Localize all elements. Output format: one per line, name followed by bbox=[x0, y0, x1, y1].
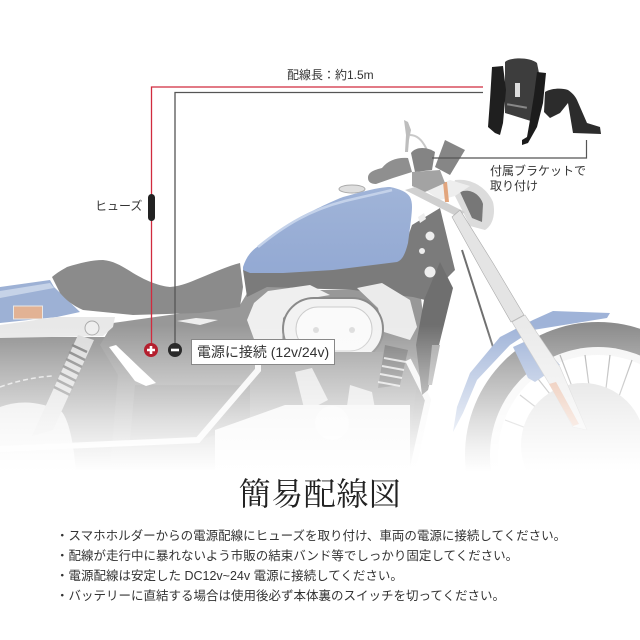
bracket label: 付属ブラケットで bbox=[490, 164, 586, 178]
front wheel bbox=[465, 322, 640, 456]
bracket arm bbox=[544, 89, 601, 134]
rear reflector bbox=[14, 306, 42, 319]
logo bbox=[515, 83, 520, 97]
illustration: faded motorcycle bbox=[0, 120, 640, 456]
instructions list: ・バッテリーに直結する場合は使用後必ず本体裏のスイッチを切ってください。 bbox=[56, 589, 505, 603]
seat bbox=[52, 260, 243, 315]
exhaust pipes bbox=[72, 358, 427, 452]
right arm bbox=[522, 72, 546, 145]
fuel cap bbox=[339, 185, 365, 193]
headlight bbox=[425, 180, 494, 230]
turn signal bbox=[443, 182, 449, 202]
wire length label: 配線長：約1.5m bbox=[287, 68, 374, 82]
rear frame strip bbox=[0, 317, 115, 338]
brand mark bbox=[507, 103, 527, 109]
power connection label: 電源に接続 (12v/24v) bbox=[197, 344, 329, 360]
instructions list: ・スマホホルダーからの電源配線にヒューズを取り付け、車両の電源に接続してください。 bbox=[56, 529, 566, 543]
rear shock absorber bbox=[46, 320, 100, 412]
power connection label bbox=[191, 339, 335, 365]
handlebar and mirror bbox=[368, 120, 465, 192]
frame bolts bbox=[418, 213, 436, 278]
front fender bbox=[453, 311, 610, 432]
front fork bbox=[405, 187, 524, 347]
under seat highlight bbox=[177, 318, 218, 325]
fuse label: ヒューズ bbox=[95, 199, 142, 213]
bracket label: 取り付け bbox=[490, 179, 538, 193]
instructions list bbox=[56, 529, 566, 603]
fuel tank bbox=[243, 187, 412, 273]
instructions list: ・配線が走行中に暴れないよう市販の結束バンド等でしっかり固定してください。 bbox=[56, 549, 518, 563]
tank highlight bbox=[258, 190, 392, 247]
fork lower stripe bbox=[549, 382, 579, 426]
frame and lower body bbox=[104, 287, 425, 454]
illustration fade bbox=[0, 325, 640, 475]
steering neck and frame bbox=[416, 262, 453, 395]
title: 簡易配線図 bbox=[239, 476, 401, 512]
white wedge bbox=[109, 345, 156, 386]
bracket label bbox=[490, 164, 586, 193]
rear wheel bbox=[0, 337, 118, 456]
holder body bbox=[505, 58, 540, 122]
rear fender bbox=[0, 280, 80, 323]
left arm bbox=[488, 66, 506, 135]
instructions list: ・電源配線は安定した DC12v~24v 電源に接続してください。 bbox=[56, 569, 403, 583]
engine bbox=[215, 283, 417, 452]
under-tank dark band bbox=[243, 208, 455, 300]
fork lower slider bbox=[512, 314, 578, 408]
